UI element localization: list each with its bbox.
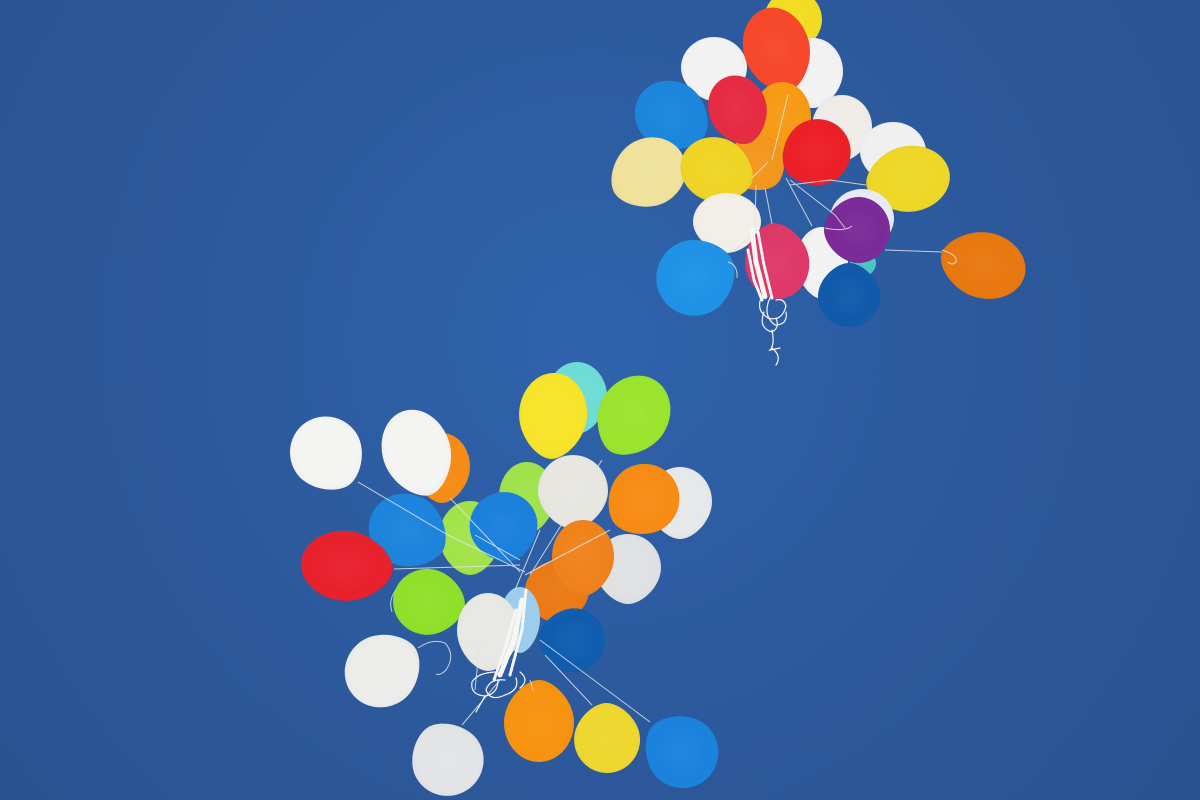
balloon: white behind pink [796,227,848,299]
balloon: orange centre [552,520,614,596]
balloon: white far left [276,402,378,506]
balloon: lime top [581,362,685,470]
balloon: dark orange [933,223,1033,307]
balloon: white bottom [397,709,497,800]
balloon: blue [622,68,722,164]
balloon: white right [783,38,843,108]
balloon: blue centre [462,484,546,570]
balloon: orange lower [717,123,797,203]
balloon: yellow bottom [573,702,641,774]
balloon: orange bottom [504,680,574,762]
balloon: orange lower [525,561,589,623]
balloon: orange right [592,449,694,551]
balloon: green centre [499,462,555,534]
balloon: yellow top [517,371,589,461]
top balloon cluster [597,0,1033,365]
balloon: bright blue [644,226,748,328]
balloon: cyan sliver [850,251,876,277]
balloon: orange [753,82,811,154]
balloon: blue bottom [629,699,733,800]
balloon: dark blue lower [534,603,610,677]
balloon: white centre [538,455,608,529]
balloon: white lower [693,193,761,253]
balloon: pale yellow [597,124,699,222]
balloon: white lower centre [457,593,519,671]
balloon: white far right [860,122,926,184]
balloon: green lower [390,566,468,638]
balloon: orange-red [733,0,821,100]
strings: bottom cluster [358,460,650,725]
balloon: white right [648,467,712,539]
balloon: white behind purple [830,189,894,251]
balloon: white lower right [595,534,661,604]
balloon: orange behind white [414,433,470,503]
ribbons: bottom cluster [472,590,526,712]
balloon: yellow right [862,140,954,218]
balloon: yellow centre [671,127,763,213]
balloon: dark blue [818,263,880,327]
balloon: white [812,95,872,161]
ribbons: top cluster [748,230,786,365]
balloon: blue left [355,480,461,582]
strings: top cluster [728,95,956,278]
balloon: pink [740,219,814,303]
balloon: red left [298,527,396,605]
balloon: white lower left [330,618,436,722]
balloon: yellow top [764,0,822,52]
balloon: purple [824,197,890,263]
balloon: red centre [769,107,863,199]
balloon: cyan top [547,362,607,434]
balloon: white tall [371,401,463,505]
balloon: white [681,37,747,101]
balloon: red [700,68,776,152]
balloon: pale blue [500,587,540,653]
balloon: green left [439,501,501,575]
bottom balloon cluster [276,362,733,800]
